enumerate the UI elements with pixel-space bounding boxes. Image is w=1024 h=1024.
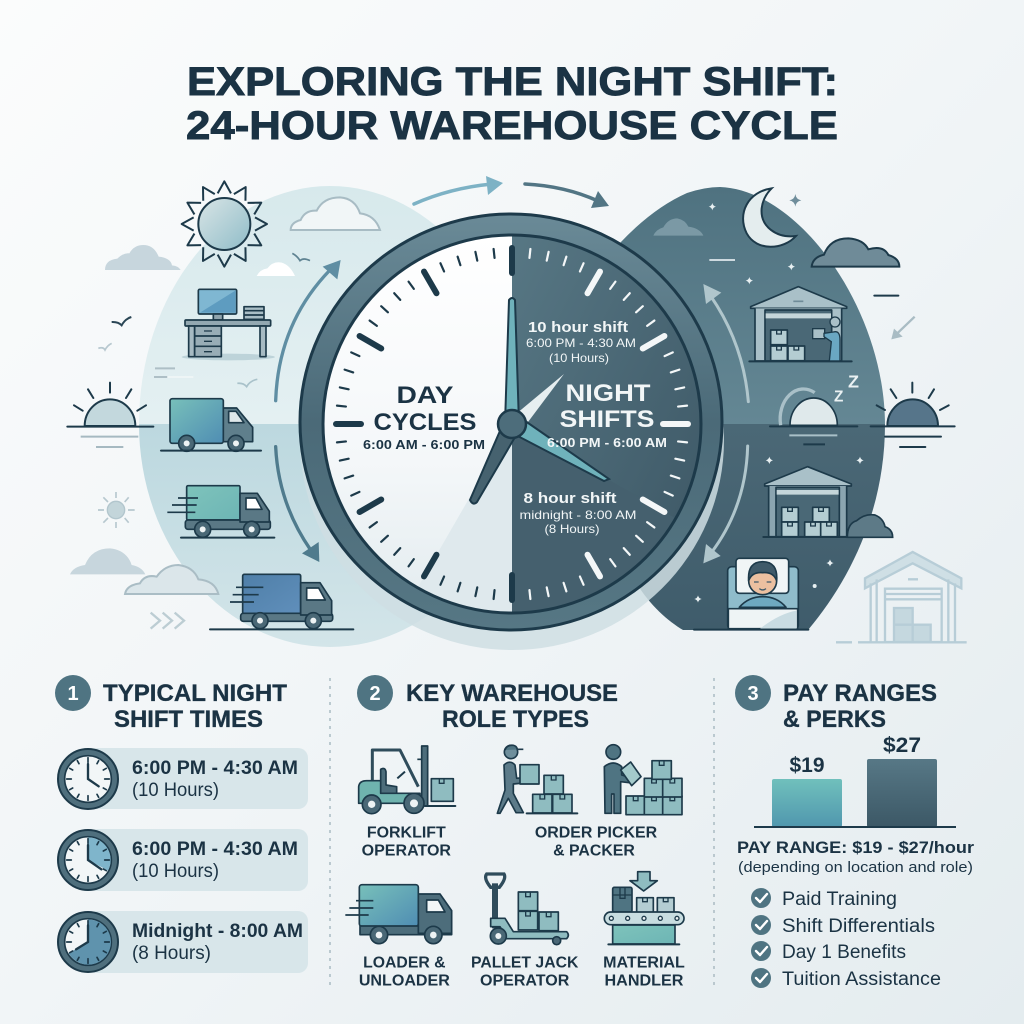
label: pallet jack operator: PALLET JACK bbox=[471, 955, 579, 972]
panel: day side backdrop bbox=[139, 186, 521, 647]
icon: order pickers bbox=[497, 745, 682, 815]
label: order picker and packer bbox=[535, 824, 658, 860]
icon: delivery truck 1 bbox=[161, 399, 261, 451]
text: pay range summary bbox=[737, 838, 974, 876]
shift row 1: (10 Hours) bbox=[132, 780, 219, 801]
icon: clouds and birds bbox=[98, 197, 380, 387]
label: loader and unloader: LOADER & bbox=[363, 955, 446, 972]
arrow: day cycle down bbox=[276, 447, 319, 562]
icon: pallet jack bbox=[486, 874, 568, 945]
heading 2 bbox=[357, 675, 618, 733]
clock shadow bbox=[300, 230, 724, 650]
label: forklift operator: FORKLIFT bbox=[367, 824, 446, 841]
icon: office desk bbox=[182, 289, 275, 360]
heading 1: 1 bbox=[67, 683, 79, 705]
heading 1: SHIFT TIMES bbox=[114, 706, 263, 733]
title: EXPLORING THE NIGHT SHIFT: bbox=[187, 60, 838, 104]
clock text: night shifts: 6:00 PM - 6:00 AM bbox=[547, 435, 667, 450]
shift row 1: 6:00 PM - 4:30 AM bbox=[132, 758, 298, 779]
text: pay range summary: PAY RANGE: $19 - $27/hour bbox=[737, 838, 974, 857]
arrow: day cycle up bbox=[276, 260, 341, 401]
heading 2: KEY WAREHOUSE bbox=[406, 680, 618, 707]
panel: night side backdrop bbox=[600, 187, 885, 630]
clock text: 8 hour shift: midnight - 8:00 AM bbox=[520, 508, 636, 522]
clock night half bbox=[512, 236, 700, 612]
day ticks bbox=[336, 248, 512, 600]
icon: setting moon bbox=[770, 389, 857, 444]
arrow: night cycle up bbox=[703, 284, 748, 402]
clock text: day cycles: 6:00 AM - 6:00 PM bbox=[363, 437, 485, 452]
divider 1 bbox=[329, 678, 331, 985]
label: forklift operator bbox=[362, 824, 451, 860]
clock text: night shifts: SHIFTS bbox=[560, 406, 654, 433]
arrow: top right bbox=[525, 184, 609, 208]
clock day half bbox=[324, 236, 512, 612]
clock outer ring bbox=[300, 214, 722, 630]
arrow: night cycle down bbox=[703, 446, 748, 563]
icon: delivery truck 2 bbox=[167, 486, 274, 538]
heading 1: TYPICAL NIGHT bbox=[103, 680, 287, 707]
text: pay range summary: (depending on location and role) bbox=[738, 859, 973, 876]
perks list: Day 1 Benefits bbox=[782, 942, 906, 963]
clock night wedge bbox=[512, 424, 675, 612]
label: material handler: MATERIAL bbox=[603, 955, 685, 972]
icon: sun bbox=[182, 181, 267, 267]
icon: forklift bbox=[359, 746, 455, 814]
icon: stocked warehouse bbox=[763, 457, 893, 537]
bar chart: pay range bbox=[754, 734, 956, 827]
label: material handler: HANDLER bbox=[604, 973, 684, 990]
icon: sleep Z letters: Z bbox=[848, 371, 859, 391]
label: material handler bbox=[603, 955, 685, 990]
heading 1 bbox=[55, 675, 287, 733]
clock text: 10 hour shift: (10 Hours) bbox=[549, 351, 609, 365]
icon: sunset outside bbox=[871, 296, 955, 447]
title bbox=[186, 60, 838, 148]
icon: delivery truck 3 bbox=[210, 574, 353, 629]
clock text: day cycles bbox=[363, 382, 485, 452]
heading 3: PAY RANGES bbox=[783, 680, 937, 707]
heading 3: 3 bbox=[747, 683, 759, 705]
clock hands bbox=[470, 298, 609, 504]
shift row 3 bbox=[58, 911, 308, 973]
clock text: day cycles: DAY bbox=[396, 382, 454, 409]
clock text: 10 hour shift: 6:00 PM - 4:30 AM bbox=[526, 336, 636, 350]
clock text: day cycles: CYCLES bbox=[374, 409, 476, 436]
clock text: night shifts: NIGHT bbox=[566, 380, 651, 407]
perks list bbox=[751, 888, 941, 990]
night side illustrations bbox=[653, 188, 967, 642]
clock text: 8 hour shift: (8 Hours) bbox=[544, 522, 600, 536]
panel: pay ranges and perks bbox=[735, 675, 974, 990]
perks list: Tuition Assistance bbox=[782, 969, 941, 990]
heading 2: ROLE TYPES bbox=[442, 706, 589, 733]
shift row 3: (8 Hours) bbox=[132, 943, 211, 964]
divider 2 bbox=[713, 678, 715, 985]
shift row 3: Midnight - 8:00 AM bbox=[132, 921, 303, 942]
perks list: Paid Training bbox=[782, 889, 897, 910]
shift row 1 bbox=[58, 748, 308, 809]
icon: small sun bbox=[98, 492, 135, 528]
label: order picker and packer: & PACKER bbox=[553, 843, 635, 860]
icon: warehouse with worker bbox=[749, 287, 852, 361]
icon: night cloud bbox=[812, 238, 899, 267]
arrow: top left bbox=[414, 176, 503, 204]
clock day wedge bbox=[418, 424, 512, 612]
night ticks bbox=[529, 249, 688, 599]
label: order picker and packer: ORDER PICKER bbox=[535, 824, 658, 841]
icon: lower clouds and chevrons bbox=[70, 548, 218, 629]
shift row 2 bbox=[58, 829, 308, 891]
clock text: 10 hour shift bbox=[526, 319, 636, 365]
clock bbox=[300, 214, 724, 650]
panel: key warehouse role types bbox=[345, 675, 685, 990]
label: pallet jack operator: OPERATOR bbox=[480, 973, 570, 990]
title: 24-HOUR WAREHOUSE CYCLE bbox=[186, 104, 838, 148]
icon: person sleeping in bed bbox=[694, 558, 834, 630]
panel: typical night shift times bbox=[55, 675, 308, 973]
icon: loader truck bbox=[345, 885, 452, 944]
icon: sleep Z letters bbox=[834, 371, 859, 405]
label: loader and unloader: UNLOADER bbox=[359, 973, 450, 990]
heading 2: 2 bbox=[369, 683, 381, 705]
day side illustrations bbox=[67, 181, 380, 629]
clock text: 10 hour shift: 10 hour shift bbox=[528, 319, 628, 336]
icon: sleep Z letters: Z bbox=[834, 388, 843, 405]
shift row 2: 6:00 PM - 4:30 AM bbox=[132, 839, 298, 860]
icon: faded warehouse bbox=[836, 552, 967, 642]
label: forklift operator: OPERATOR bbox=[362, 843, 451, 860]
icon: conveyor material handling bbox=[604, 872, 684, 944]
clock text: 8 hour shift bbox=[520, 490, 636, 536]
label: pallet jack operator bbox=[471, 955, 579, 990]
icon: sunrise bbox=[67, 383, 153, 447]
heading 3: & PERKS bbox=[783, 706, 886, 733]
heading 3 bbox=[735, 675, 937, 733]
perks list: Shift Differentials bbox=[782, 916, 935, 937]
icon: moon and stars bbox=[653, 188, 801, 284]
label: loader and unloader bbox=[359, 955, 450, 990]
bar chart: pay range: $19 bbox=[790, 754, 824, 777]
bar chart: pay range: $27 bbox=[883, 734, 921, 757]
clock text: 8 hour shift: 8 hour shift bbox=[524, 490, 616, 507]
clock text: night shifts bbox=[547, 380, 667, 450]
shift row 2: (10 Hours) bbox=[132, 861, 219, 882]
